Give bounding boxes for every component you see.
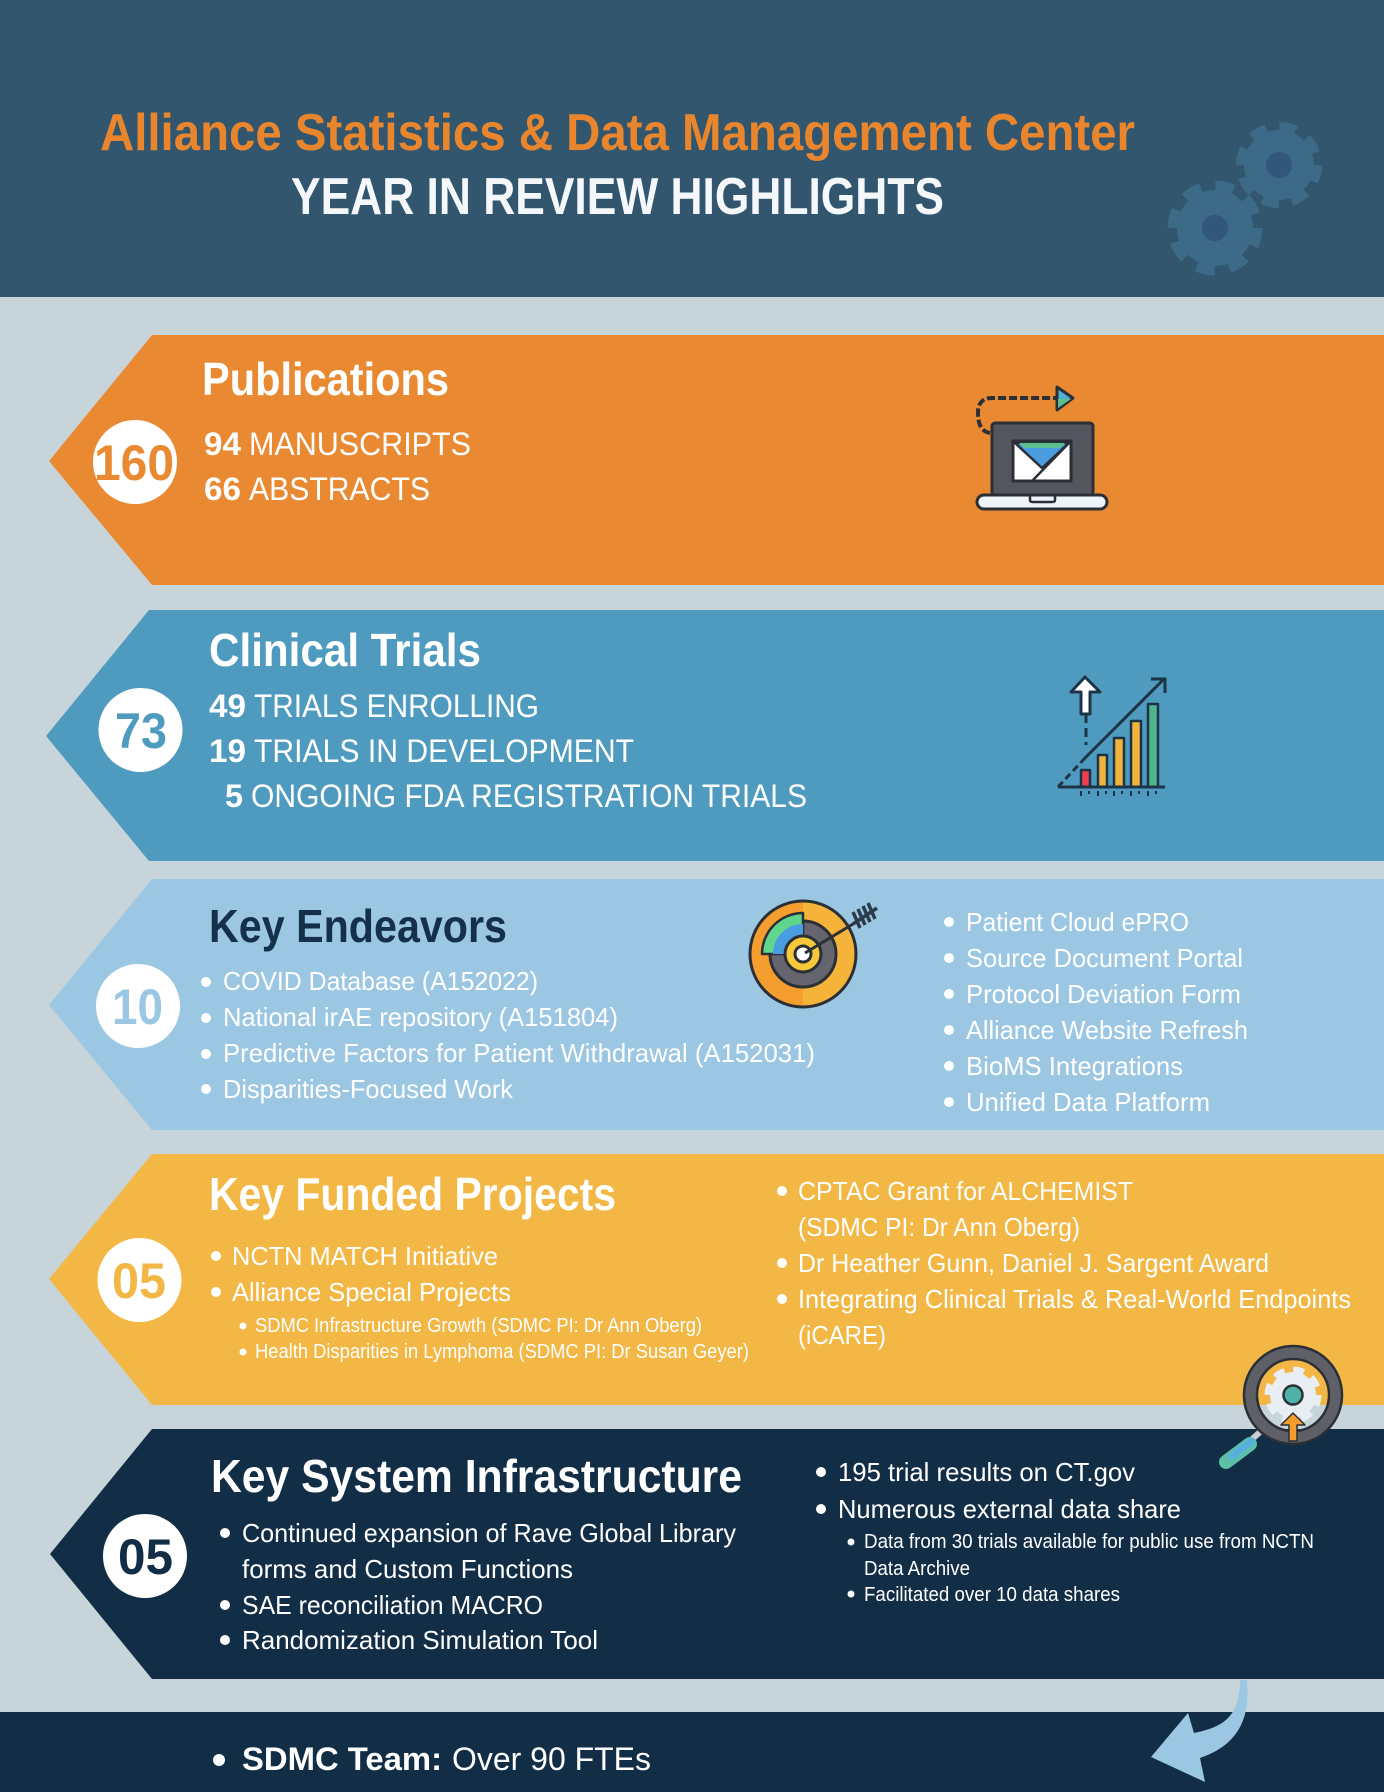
- list: infrastructure left: forms and Custom Functions: [242, 1554, 573, 1584]
- list: funded projects right: Dr Heather Gunn, Daniel J. Sargent Award: [798, 1248, 1269, 1278]
- abstracts count: 66: [204, 471, 241, 507]
- trials in development: 19: [209, 733, 246, 769]
- list: endeavors right: Protocol Deviation Form: [966, 979, 1241, 1009]
- manuscripts count: 94: [204, 426, 241, 462]
- panel: key funded projects: [49, 1154, 1384, 1405]
- abstracts count: ABSTRACTS: [249, 471, 430, 507]
- list: funded projects right: CPTAC Grant for ALCHEMIST: [798, 1176, 1133, 1206]
- count circle: 05: [98, 1238, 182, 1322]
- list: infrastructure right: Facilitated over 10 data shares: [864, 1584, 1120, 1606]
- count circle: 05: [103, 1514, 187, 1598]
- key funded projects heading: Key Funded Projects: [209, 1168, 616, 1220]
- list: endeavors right: Patient Cloud ePRO: [966, 907, 1189, 937]
- publications heading: Publications: [202, 353, 449, 405]
- list: infrastructure right: Data from 30 trials available for public use from NCTN: [864, 1531, 1314, 1553]
- list: infrastructure right: 195 trial results on CT.gov: [838, 1457, 1135, 1487]
- list: funded projects left: SDMC Infrastructure Growth (SDMC PI: Dr Ann Oberg): [255, 1315, 702, 1337]
- list: endeavors left: National irAE repository (A151804): [223, 1002, 618, 1032]
- clinical trials heading: Clinical Trials: [209, 624, 481, 676]
- count circle: 05: 05: [118, 1529, 173, 1585]
- list: endeavors left: Predictive Factors for Patient Withdrawal (A152031): [223, 1038, 815, 1068]
- list: funded projects right: (iCARE): [798, 1320, 886, 1350]
- list: infrastructure left: Continued expansion of Rave Global Library: [242, 1518, 736, 1548]
- list: funded projects left: Alliance Special Projects: [232, 1277, 511, 1307]
- key endeavors heading: Key Endeavors: [209, 900, 507, 952]
- list: funded projects left: Health Disparities in Lymphoma (SDMC PI: Dr Susan Geyer): [255, 1341, 749, 1363]
- panel: key system infrastructure: [50, 1429, 1384, 1679]
- trials enrolling: TRIALS ENROLLING: [254, 688, 539, 724]
- panel: key endeavors: [49, 879, 1384, 1130]
- icon: gears: [1174, 128, 1316, 269]
- list: funded projects left: NCTN MATCH Initiative: [232, 1241, 498, 1271]
- team statement: [213, 1741, 651, 1777]
- title line 1: Alliance Statistics & Data Management Center: [100, 104, 1135, 162]
- list: funded projects right: (SDMC PI: Dr Ann Oberg): [798, 1212, 1080, 1242]
- FDA registration trials: ONGOING FDA REGISTRATION TRIALS: [251, 778, 807, 814]
- team statement: Over 90 FTEs: [452, 1741, 651, 1777]
- count circle: 10: [96, 964, 180, 1048]
- list: endeavors right: Source Document Portal: [966, 943, 1243, 973]
- panel: publications: [49, 335, 1384, 585]
- list: endeavors left: COVID Database (A152022): [223, 966, 538, 996]
- manuscripts count: MANUSCRIPTS: [249, 426, 471, 462]
- list: infrastructure right: [816, 1457, 1314, 1606]
- arrow: curved arrow pointing to footer: [1151, 1680, 1248, 1782]
- icon: magnifying glass with gear: [1226, 1346, 1342, 1462]
- list: infrastructure left: Randomization Simulation Tool: [242, 1625, 598, 1655]
- title line 2: YEAR IN REVIEW HIGHLIGHTS: [291, 168, 944, 226]
- count circle: 73: 73: [115, 703, 167, 759]
- list: endeavors right: Alliance Website Refresh: [966, 1015, 1248, 1045]
- list: endeavors right: Unified Data Platform: [966, 1087, 1210, 1117]
- count circle: 160: 160: [94, 435, 174, 491]
- list: infrastructure left: SAE reconciliation MACRO: [242, 1590, 543, 1620]
- panel: header: [0, 0, 1384, 297]
- icon: laptop with envelope: [977, 387, 1107, 509]
- list: endeavors right: [944, 907, 1248, 1117]
- count circle: 10: 10: [112, 979, 163, 1035]
- list: infrastructure right: Numerous external data share: [838, 1494, 1181, 1524]
- trials in development: TRIALS IN DEVELOPMENT: [254, 733, 634, 769]
- team statement: SDMC Team:: [242, 1741, 442, 1777]
- list: endeavors left: [201, 966, 815, 1104]
- panel: clinical trials: [46, 610, 1384, 861]
- list: funded projects right: [777, 1176, 1351, 1350]
- count circle: 73: [98, 688, 182, 772]
- list: infrastructure right: Data Archive: [864, 1558, 970, 1580]
- icon: rising bar chart: [1058, 677, 1165, 796]
- list: endeavors right: BioMS Integrations: [966, 1051, 1183, 1081]
- count circle: 05: 05: [112, 1253, 166, 1309]
- panel: footer: [0, 1712, 1384, 1792]
- icon: target with arrow: [750, 901, 877, 1007]
- list: funded projects right: Integrating Clinical Trials & Real-World Endpoints: [798, 1284, 1351, 1314]
- FDA registration trials: 5: [225, 778, 243, 814]
- key system infrastructure heading: Key System Infrastructure: [211, 1450, 742, 1502]
- list: endeavors left: Disparities-Focused Work: [223, 1074, 514, 1104]
- list: funded projects left: [211, 1241, 749, 1363]
- trials enrolling: 49: [209, 688, 246, 724]
- count circle: 160: [93, 420, 177, 504]
- list: infrastructure left: [220, 1518, 736, 1655]
